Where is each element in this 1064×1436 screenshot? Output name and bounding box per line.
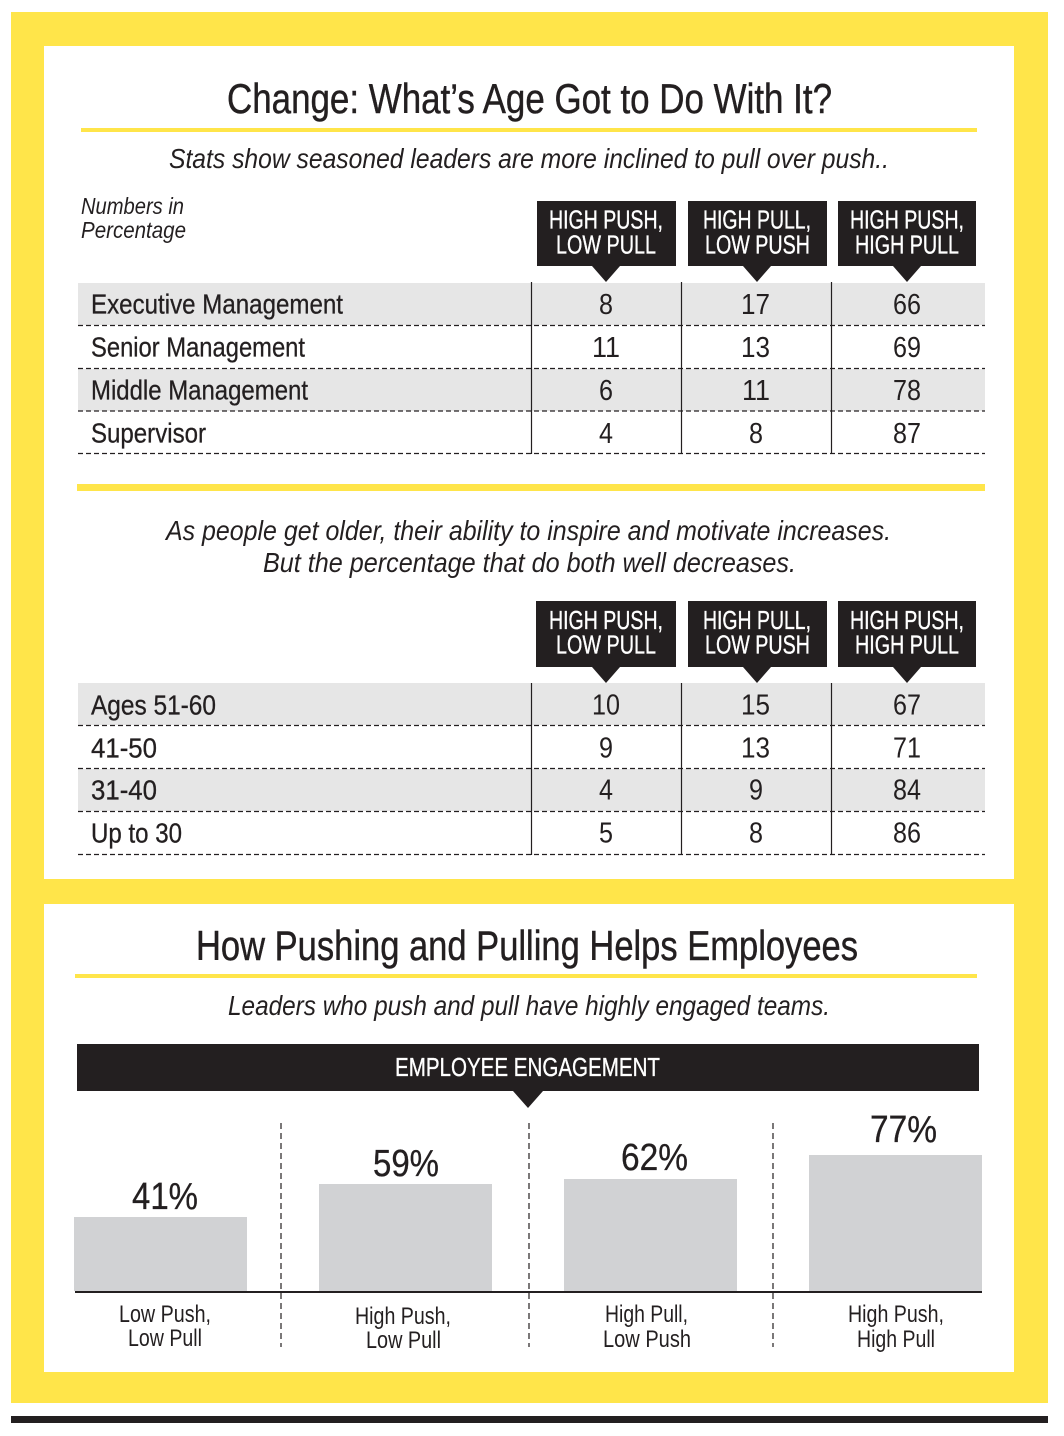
banner: employee engagement: [77, 1044, 979, 1108]
row: 41-50: 13: [741, 732, 770, 764]
table: management levels: [78, 201, 985, 454]
bar: high pull, low push: High Pull,: [605, 1301, 688, 1328]
row: middle management: 78: [893, 375, 921, 407]
row: executive management: 8: [599, 289, 613, 321]
row: 31-40: 84: [893, 774, 921, 806]
subtitle: Leaders who push and pull have highly engaged teams.: [228, 990, 830, 1021]
title: Change: What’s Age Got to Do With It?: [227, 75, 832, 122]
row: supervisor: Supervisor: [91, 418, 206, 448]
row: senior management: 11: [592, 332, 620, 364]
row: 41-50: 71: [893, 732, 921, 764]
row: middle management: 11: [742, 375, 770, 407]
row: senior management: 69: [893, 332, 921, 364]
header tag: high pull, low push: LOW PUSH: [705, 632, 810, 660]
row: senior management: 13: [741, 332, 770, 364]
row: 31-40: 4: [599, 774, 613, 806]
title rule: [81, 128, 977, 132]
bar: high push, high pull: High Pull: [857, 1326, 935, 1353]
header tag: high push, low pull: LOW PULL: [556, 232, 656, 260]
row: up to 30: 8: [749, 818, 763, 850]
row: supervisor: 4: [599, 418, 613, 450]
header tag: high push, low pull: [537, 201, 676, 282]
row: ages 51-60: Ages 51-60: [91, 690, 216, 720]
bar: high push, high pull: [809, 1109, 982, 1353]
chart baseline: [75, 1291, 982, 1293]
header tag: high push, high pull: HIGH PUSH,: [850, 607, 964, 635]
bar: high pull, low push: 62%: [621, 1137, 688, 1179]
row: executive management: [91, 288, 921, 321]
bar: low push, low pull: Low Push,: [119, 1301, 211, 1328]
row: supervisor: [91, 418, 921, 450]
header tag: high pull, low push: HIGH PULL,: [703, 206, 811, 234]
bar: high pull, low push: [564, 1137, 737, 1353]
row: ages 51-60: 15: [741, 690, 770, 722]
header tag: high push, low pull: HIGH PUSH,: [549, 206, 663, 234]
row: executive management: 17: [741, 289, 770, 321]
header tag: high push, low pull: HIGH PUSH,: [549, 607, 663, 635]
row: 31-40: [91, 774, 921, 806]
row: up to 30: 86: [893, 818, 921, 850]
age statement: As people get older, their ability to inspire and motivate increases.: [164, 515, 891, 546]
panel: employee engagement: [44, 904, 1014, 1372]
bar: high push, high pull: 77%: [870, 1109, 937, 1151]
bar: high push, low pull: High Push,: [355, 1303, 451, 1330]
bar: high push, low pull: Low Pull: [366, 1327, 441, 1354]
row: 41-50: 9: [599, 732, 613, 764]
bar: high pull, low push: Low Push: [603, 1326, 691, 1353]
header tag: high pull, low push: [688, 201, 827, 282]
row: middle management: Middle Management: [91, 374, 308, 406]
bar: high push, low pull: 59%: [373, 1143, 439, 1185]
row: senior management: [91, 332, 921, 364]
bar chart: [74, 1109, 982, 1354]
section divider: [77, 484, 985, 491]
row: 31-40: 31-40: [91, 774, 157, 806]
header tag: high push, high pull: HIGH PUSH,: [850, 206, 964, 234]
note: numbers in percentage: Numbers in: [81, 193, 184, 219]
row: executive management: 66: [893, 289, 921, 321]
panel: change and age: [44, 46, 1014, 879]
age statement: But the percentage that do both well decreases.: [263, 547, 796, 578]
bar: high push, low pull: [319, 1143, 492, 1354]
header tag: high pull, low push: LOW PUSH: [705, 232, 810, 260]
row: up to 30: 5: [599, 818, 613, 850]
row: supervisor: 8: [749, 418, 763, 450]
subtitle: Stats show seasoned leaders are more inclined to pull over push..: [169, 143, 889, 174]
note: numbers in percentage: Percentage: [81, 217, 186, 243]
header tag: high push, low pull: [536, 601, 676, 683]
row: up to 30: [91, 818, 921, 850]
note: numbers in percentage: [81, 193, 186, 243]
row: middle management: 6: [599, 375, 613, 407]
row: ages 51-60: [91, 690, 921, 722]
header tag: high pull, low push: [688, 601, 827, 683]
table: age groups: [78, 601, 985, 855]
row: 31-40: 9: [749, 774, 763, 806]
banner: employee engagement: EMPLOYEE ENGAGEMENT: [395, 1054, 660, 1082]
bar: high push, high pull: High Push,: [848, 1301, 944, 1328]
bar: low push, low pull: Low Pull: [128, 1325, 202, 1352]
title rule: [75, 974, 977, 978]
row: senior management: Senior Management: [91, 332, 305, 362]
row: middle management: [91, 374, 921, 407]
header tag: high push, high pull: [838, 201, 976, 282]
header tag: high push, high pull: HIGH PULL: [855, 632, 959, 660]
header tag: high pull, low push: HIGH PULL,: [703, 607, 811, 635]
age statement: [164, 515, 891, 578]
row: supervisor: 87: [893, 418, 921, 450]
header tag: high push, high pull: HIGH PULL: [855, 232, 959, 260]
bar: low push, low pull: 41%: [132, 1176, 198, 1218]
bottom black rule: [11, 1416, 1048, 1423]
bar: low push, low pull: [74, 1176, 247, 1352]
row: up to 30: Up to 30: [91, 818, 182, 848]
row: 41-50: 41-50: [91, 732, 157, 764]
row: 41-50: [91, 732, 921, 764]
row: executive management: Executive Management: [91, 288, 343, 320]
header tag: high push, high pull: [838, 601, 976, 683]
header tag: high push, low pull: LOW PULL: [556, 632, 656, 660]
row: ages 51-60: 67: [893, 690, 921, 722]
title: How Pushing and Pulling Helps Employees: [196, 922, 858, 969]
row: ages 51-60: 10: [592, 690, 620, 722]
